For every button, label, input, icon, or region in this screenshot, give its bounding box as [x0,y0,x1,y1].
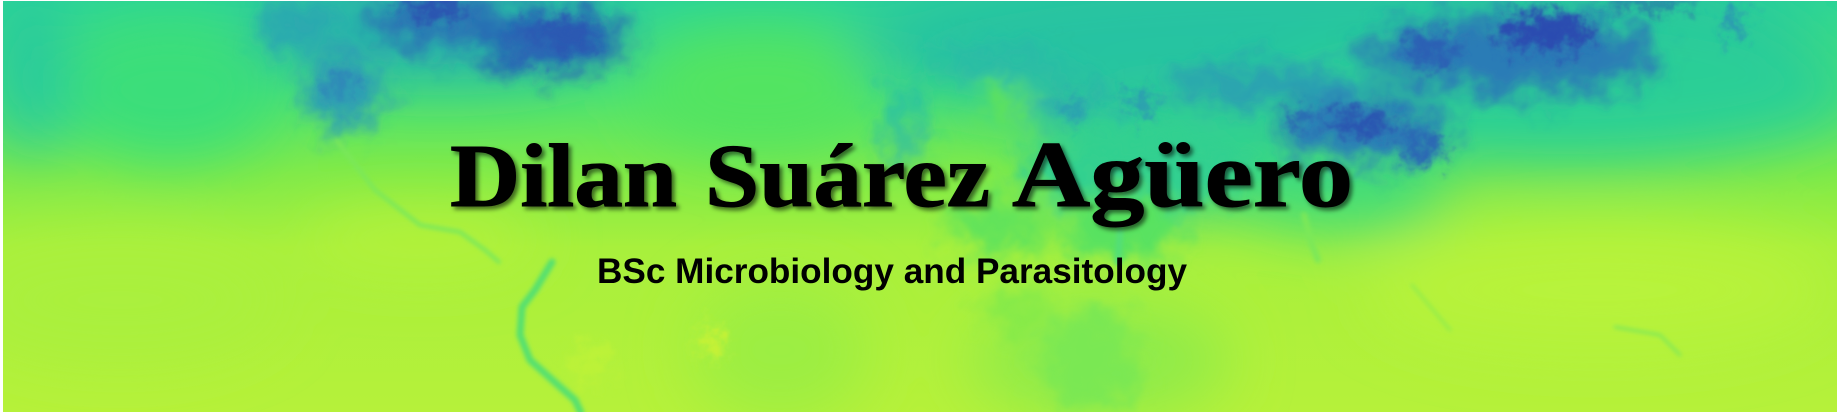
title: Agüero [1012,123,1353,227]
title [450,123,1353,227]
subtitle: BSc Microbiology and Parasitology [597,252,1188,291]
title: Suárez [705,127,990,226]
title: Dilan [450,127,677,226]
